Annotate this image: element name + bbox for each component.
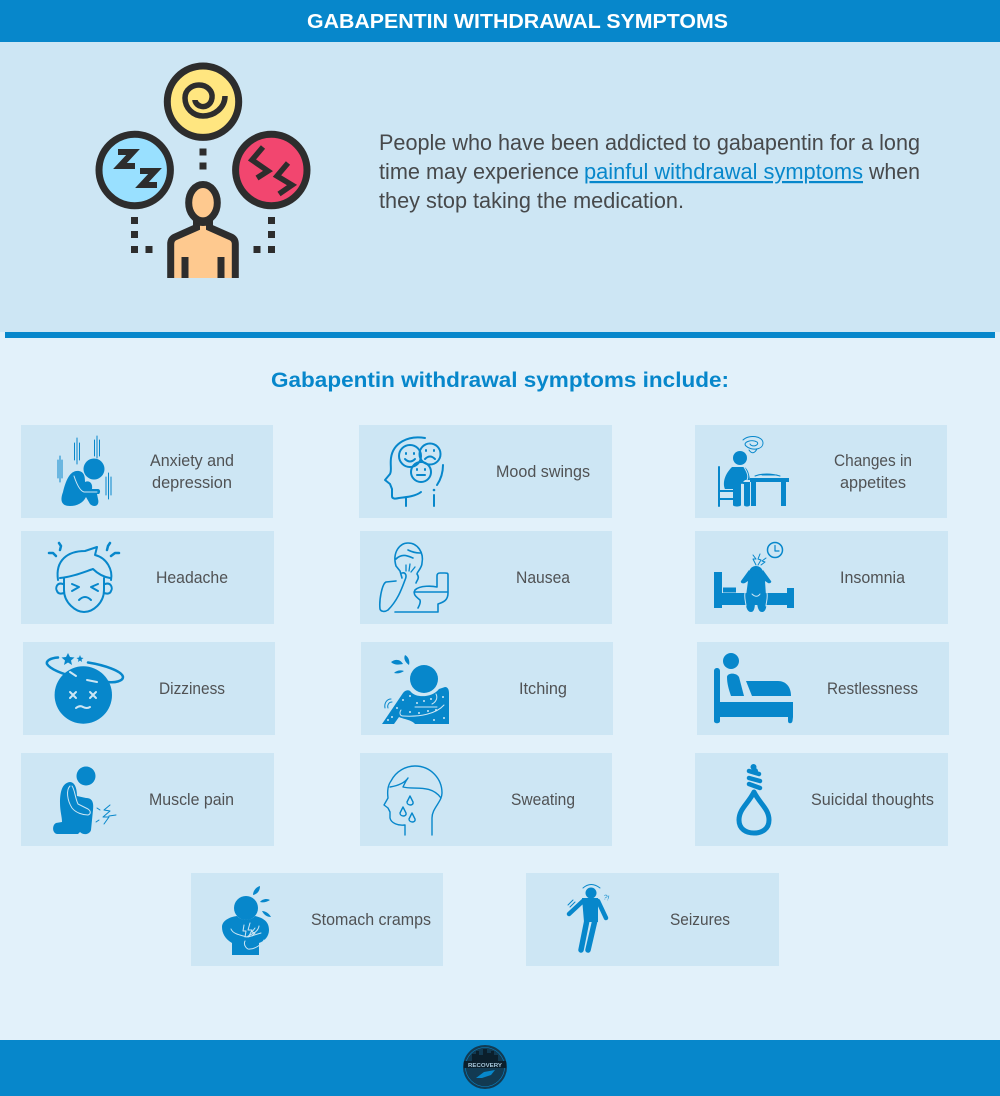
card: headache [21,531,274,624]
icon: person sitting in bed [714,653,793,723]
icon: head with three faces [385,437,443,506]
header banner [0,0,1000,42]
icon: person holding knee [53,766,116,834]
icon: person at toilet [380,543,448,612]
icon: person awake on bed [714,542,794,612]
card: anxiety and depression [21,425,273,518]
label [150,452,234,492]
label: appetites [840,474,906,492]
label [834,452,912,492]
card: suicidal thoughts [695,753,948,846]
label: Itching [519,680,567,698]
panel: introduction [0,42,1000,338]
intro text: time may experience [379,159,579,184]
intro text: they stop taking the medication. [379,188,684,213]
footer band [0,1040,1000,1096]
icon: person at table [719,436,789,506]
icon: person holding stomach [222,886,271,955]
label: Sweating [511,791,575,809]
icon: dizzy face [47,653,123,724]
card: insomnia [695,531,948,624]
intro text: painful withdrawal symptoms [584,159,863,184]
icon: shaking person [568,884,610,950]
label: Insomnia [840,569,906,587]
card: itching [361,642,613,735]
icon: pained face [49,543,119,612]
label: Stomach cramps [311,911,431,929]
card: muscle pain [21,753,274,846]
icon: anxious person [58,436,111,506]
logo: recovery badge: RECOVERY [468,1063,502,1069]
intro text: People who have been addicted to gabapentin for a long [379,130,920,155]
icon: shaking person: ?! [602,894,610,902]
label: depression [152,474,232,492]
title: GABAPENTIN WITHDRAWAL SYMPTOMS [307,11,728,33]
card: seizures [526,873,779,966]
card: mood swings [359,425,612,518]
label: Seizures [670,911,730,929]
icon: sweating head [384,766,442,835]
logo: recovery badge [463,1045,507,1089]
card: restlessness [697,642,949,735]
label: Restlessness [827,680,918,698]
label: Nausea [516,569,571,587]
intro text: when [868,159,920,184]
label: Mood swings [496,463,590,481]
label: Changes in [834,452,912,470]
card: stomach cramps [191,873,443,966]
label: Suicidal thoughts [811,791,934,809]
card: sweating [360,753,612,846]
card: dizziness [23,642,275,735]
label: Muscle pain [149,791,234,809]
icon: person with three thought bubbles [99,66,307,278]
intro text [379,130,920,213]
card: nausea [360,531,612,624]
card: changes in appetites [695,425,947,518]
label: Headache [156,569,228,587]
icon: noose [739,764,769,833]
label: Anxiety and [150,452,234,470]
icon: scratching person [382,655,449,724]
heading: symptoms: Gabapentin withdrawal symptoms include: [271,369,729,392]
label: Dizziness [159,680,225,698]
